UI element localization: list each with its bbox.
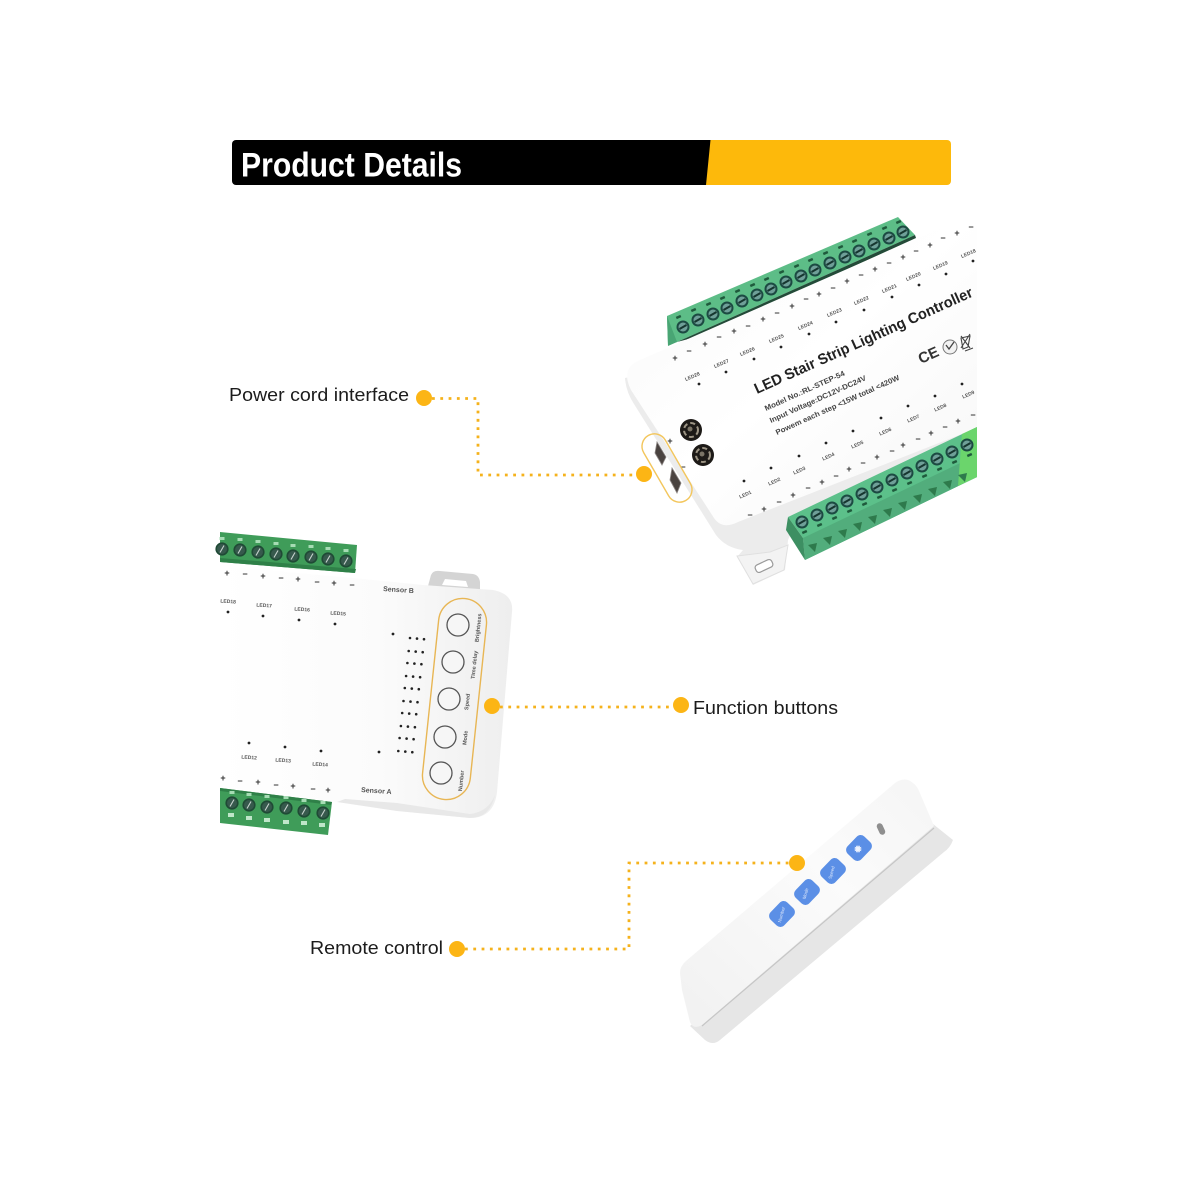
- upper polarity marks: −: [745, 321, 751, 331]
- controller housing side and mounting tab: [625, 375, 977, 585]
- heading: Product Details: Product Details: [241, 146, 462, 184]
- start marker: [484, 698, 500, 714]
- polarity marks: +: [331, 578, 337, 588]
- upper polarity marks: −: [913, 246, 919, 256]
- polarity marks: −: [314, 577, 320, 587]
- model specifications: Input Voltage:DC12V-DC24V: [768, 373, 868, 425]
- upper LED channel labels: LED25: [768, 333, 785, 345]
- lower polarity marks: −: [776, 497, 782, 507]
- polarity marks: +: [290, 781, 296, 791]
- lower LED channel labels: LED5: [851, 440, 865, 450]
- polarity marks: [220, 568, 355, 795]
- upper polarity marks: +: [954, 228, 960, 238]
- callout: function buttons: [484, 697, 838, 718]
- model specifications: Powem each step <15W total <420W: [774, 373, 902, 437]
- lower polarity marks: +: [761, 504, 767, 514]
- upper LED channel labels: LED24: [797, 320, 814, 332]
- remote top face: [680, 780, 934, 1027]
- upper LED channel labels: [684, 248, 977, 385]
- upper LED channel labels: LED19: [932, 260, 949, 272]
- upper polarity marks: −: [686, 346, 692, 356]
- label: Power cord interface: [229, 384, 409, 405]
- upper green terminal block: [215, 532, 357, 573]
- sensor labels: [361, 586, 414, 796]
- upper polarity marks: −: [803, 294, 809, 304]
- lower polarity marks: +: [874, 452, 880, 462]
- housing: [220, 566, 512, 818]
- remote buttons: Speed: [827, 865, 836, 880]
- mounting tab: [428, 571, 480, 590]
- upper polarity marks: −: [886, 258, 892, 268]
- polarity marks: +: [325, 785, 331, 795]
- product photo: controller button end: [215, 532, 512, 835]
- lower polarity marks: −: [747, 510, 753, 520]
- upper polarity marks: −: [774, 308, 780, 318]
- power cord interface ports: +: [667, 436, 673, 446]
- power cord interface ports: [655, 436, 686, 493]
- polarity marks: +: [220, 773, 226, 783]
- lower polarity marks: +: [900, 440, 906, 450]
- upper polarity marks: +: [731, 326, 737, 336]
- lower LED channel labels: LED6: [879, 427, 893, 437]
- lower polarity marks: −: [942, 422, 948, 432]
- upper polarity marks: +: [702, 339, 708, 349]
- highlight outline around power ports: [637, 429, 697, 507]
- banner black section: [232, 140, 710, 185]
- upper polarity marks: +: [900, 252, 906, 262]
- highlight outline around buttons: [420, 596, 489, 802]
- product photo: remote control: [680, 780, 953, 1043]
- power cord interface ports: −: [680, 462, 686, 472]
- label: Remote control: [310, 937, 443, 958]
- lower LED channel labels: LED3: [793, 466, 807, 476]
- lower polarity marks: +: [846, 464, 852, 474]
- LED channel labels: LED13: [275, 757, 291, 765]
- lower LED channel labels: LED9: [962, 390, 976, 400]
- remote buttons: Number: [777, 906, 786, 923]
- lower LED channel labels: LED4: [822, 452, 836, 462]
- leader line: [500, 706, 673, 708]
- lower polarity marks: −: [889, 446, 895, 456]
- certification marks: CE: [916, 344, 942, 368]
- lower LED channel labels: [739, 383, 976, 500]
- indicator dot grid: [397, 637, 425, 754]
- upper LED channel labels: LED18: [960, 248, 977, 260]
- lower polarity marks: −: [915, 434, 921, 444]
- start marker: [449, 941, 465, 957]
- upper polarity marks: +: [672, 353, 678, 363]
- remote buttons: ✹: [853, 844, 863, 856]
- upper polarity marks: +: [872, 264, 878, 274]
- remote face edge line: [702, 828, 934, 1026]
- polarity marks: −: [310, 784, 316, 794]
- controller top face: [627, 212, 977, 525]
- upper polarity marks: +: [927, 240, 933, 250]
- lower LED channel labels: LED1: [739, 490, 753, 500]
- LED channel labels: LED18: [220, 598, 236, 606]
- polarity marks: +: [224, 568, 230, 578]
- lower polarity marks: +: [928, 428, 934, 438]
- title banner: [232, 140, 951, 185]
- polarity marks: +: [260, 571, 266, 581]
- sensor labels: Sensor A: [361, 787, 392, 796]
- button labels: [458, 613, 483, 792]
- upper LED channel labels: LED28: [684, 371, 701, 383]
- remote buttons: Mode: [802, 887, 810, 900]
- end marker: [636, 466, 652, 482]
- polarity marks: −: [273, 780, 279, 790]
- lower polarity marks: [747, 410, 976, 520]
- polarity marks: +: [255, 777, 261, 787]
- callout: power cord interface: [229, 384, 652, 482]
- upper green terminal block: [667, 217, 916, 346]
- product photo: LED stair controller top view: [625, 212, 977, 585]
- sensor labels: Sensor B: [383, 586, 414, 595]
- upper LED channel labels: LED27: [713, 358, 730, 370]
- upper LED channel labels: LED23: [826, 307, 843, 319]
- upper polarity marks: −: [940, 233, 946, 243]
- lower polarity marks: +: [819, 477, 825, 487]
- leader line: [432, 398, 636, 475]
- upper LED channel labels: LED26: [739, 346, 756, 358]
- lower polarity marks: −: [970, 410, 976, 420]
- remote buttons: [767, 833, 874, 929]
- label: Function buttons: [693, 697, 838, 718]
- callout: remote control: [310, 855, 805, 958]
- upper polarity marks: −: [716, 332, 722, 342]
- lower polarity marks: +: [955, 416, 961, 426]
- LED channel labels: LED17: [256, 602, 272, 610]
- lower green terminal block: [220, 788, 332, 835]
- button labels: Brightness: [475, 613, 483, 642]
- LED channel labels: [220, 598, 394, 769]
- end marker: [789, 855, 805, 871]
- end marker: [673, 697, 689, 713]
- upper LED channel labels: LED22: [853, 295, 870, 307]
- polarity marks: −: [349, 580, 355, 590]
- upper LED channel labels: LED21: [881, 283, 898, 295]
- upper polarity marks: +: [789, 301, 795, 311]
- upper polarity marks: −: [968, 222, 974, 232]
- button labels: Number: [458, 769, 466, 792]
- LED channel labels: LED14: [312, 761, 328, 769]
- upper polarity marks: −: [830, 283, 836, 293]
- upper polarity marks: +: [760, 314, 766, 324]
- start marker: [416, 390, 432, 406]
- housing lower bevel: [337, 795, 495, 818]
- button labels: Mode: [462, 730, 470, 745]
- lower polarity marks: +: [790, 490, 796, 500]
- lower LED channel labels: LED2: [768, 477, 782, 487]
- lower LED channel labels: LED8: [934, 403, 948, 413]
- function buttons: [430, 614, 469, 784]
- lower polarity marks: −: [805, 483, 811, 493]
- upper polarity marks: +: [844, 276, 850, 286]
- polarity marks: +: [295, 574, 301, 584]
- lower green terminal block: [786, 427, 977, 560]
- banner yellow section: [700, 140, 951, 185]
- polarity marks: −: [237, 776, 243, 786]
- LED channel labels: LED16: [294, 606, 310, 614]
- polarity marks: −: [242, 569, 248, 579]
- DC mounting screws: [680, 419, 714, 466]
- product name on controller: LED Stair Strip Lighting Controller: [752, 284, 976, 398]
- remote side wall: [690, 824, 953, 1043]
- LED channel labels: LED15: [330, 610, 346, 618]
- upper polarity marks: −: [858, 270, 864, 280]
- certification marks: [916, 334, 973, 368]
- LED channel labels: LED12: [241, 754, 257, 762]
- upper polarity marks: [672, 222, 974, 363]
- lower polarity marks: −: [833, 471, 839, 481]
- button labels: Time delay: [471, 650, 480, 679]
- polarity marks: −: [278, 573, 284, 583]
- model specifications: Model No.:RL-STEP-54: [763, 368, 847, 413]
- lower LED channel labels: LED7: [907, 414, 921, 424]
- remote indicator light: [876, 822, 886, 836]
- upper polarity marks: +: [816, 289, 822, 299]
- upper LED channel labels: LED20: [905, 271, 922, 283]
- lower polarity marks: −: [860, 458, 866, 468]
- leader line: [465, 863, 789, 949]
- button labels: Speed: [464, 693, 472, 710]
